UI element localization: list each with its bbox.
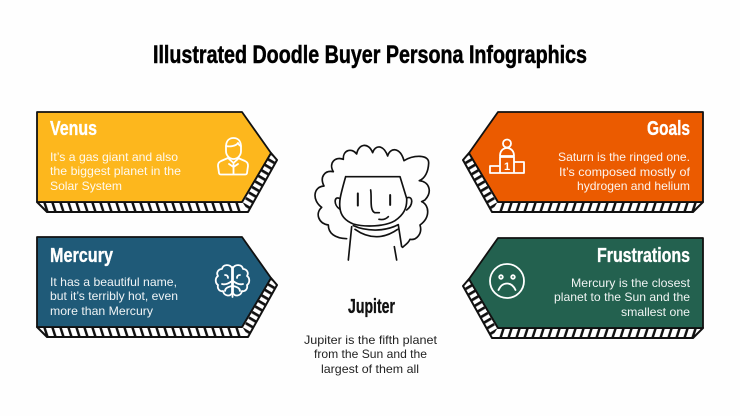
text block: Venus: the biggest planet in the: [50, 164, 181, 178]
face outline: [340, 177, 407, 226]
heading: Goals: Goals: [647, 118, 690, 140]
icon: podium: [490, 140, 524, 173]
text block: Jupiter: [304, 333, 438, 376]
panel: Mercury: [37, 237, 277, 337]
text block: Goals: [558, 150, 691, 193]
text block: Venus: It’s a gas giant and also: [50, 150, 178, 164]
icon: brain: [216, 265, 249, 297]
text block: Mercury: It has a beautiful name,: [50, 275, 177, 289]
heading: Mercury: Mercury: [50, 245, 114, 267]
text block: Goals: hydrogen and helium: [577, 179, 690, 193]
illustration: Jupiter persona face: [315, 145, 429, 260]
icon: podium: 1: [504, 161, 510, 173]
heading: Jupiter: Jupiter: [348, 296, 395, 318]
neck and collar: [348, 225, 402, 260]
heading: Venus: Venus: [50, 118, 97, 140]
text block: Venus: Solar System: [50, 179, 122, 193]
panel: Goals: [463, 112, 703, 212]
text block: Jupiter: from the Sun and the: [314, 347, 427, 361]
panel: Frustrations: [463, 238, 703, 338]
text block: Venus: [50, 150, 181, 193]
text block: Frustrations: [554, 276, 691, 319]
icon: businessman: [218, 138, 248, 174]
nose and mouth: [371, 190, 388, 220]
heading: Frustrations: Frustrations: [597, 245, 690, 267]
text block: Frustrations: planet to the Sun and the: [554, 290, 690, 304]
text block: Frustrations: Mercury is the closest: [571, 276, 691, 290]
ears: [335, 197, 412, 210]
title: Illustrated Doodle Buyer Persona Infographics: [153, 41, 587, 69]
text block: Mercury: but it’s terribly hot, even: [50, 289, 178, 303]
text block: Jupiter: Jupiter is the fifth planet: [304, 333, 438, 347]
hair: [315, 145, 429, 247]
icon: sad face: [490, 264, 524, 298]
eyes: [358, 193, 390, 206]
text block: Jupiter: largest of them all: [321, 362, 419, 376]
panel: Venus: [37, 112, 277, 212]
text block: Goals: Saturn is the ringed one.: [558, 150, 690, 164]
text block: Mercury: more than Mercury: [50, 304, 153, 318]
text block: Mercury: [50, 275, 178, 318]
text block: Frustrations: smallest one: [621, 305, 690, 319]
text block: Goals: It’s composed mostly of: [559, 165, 691, 179]
